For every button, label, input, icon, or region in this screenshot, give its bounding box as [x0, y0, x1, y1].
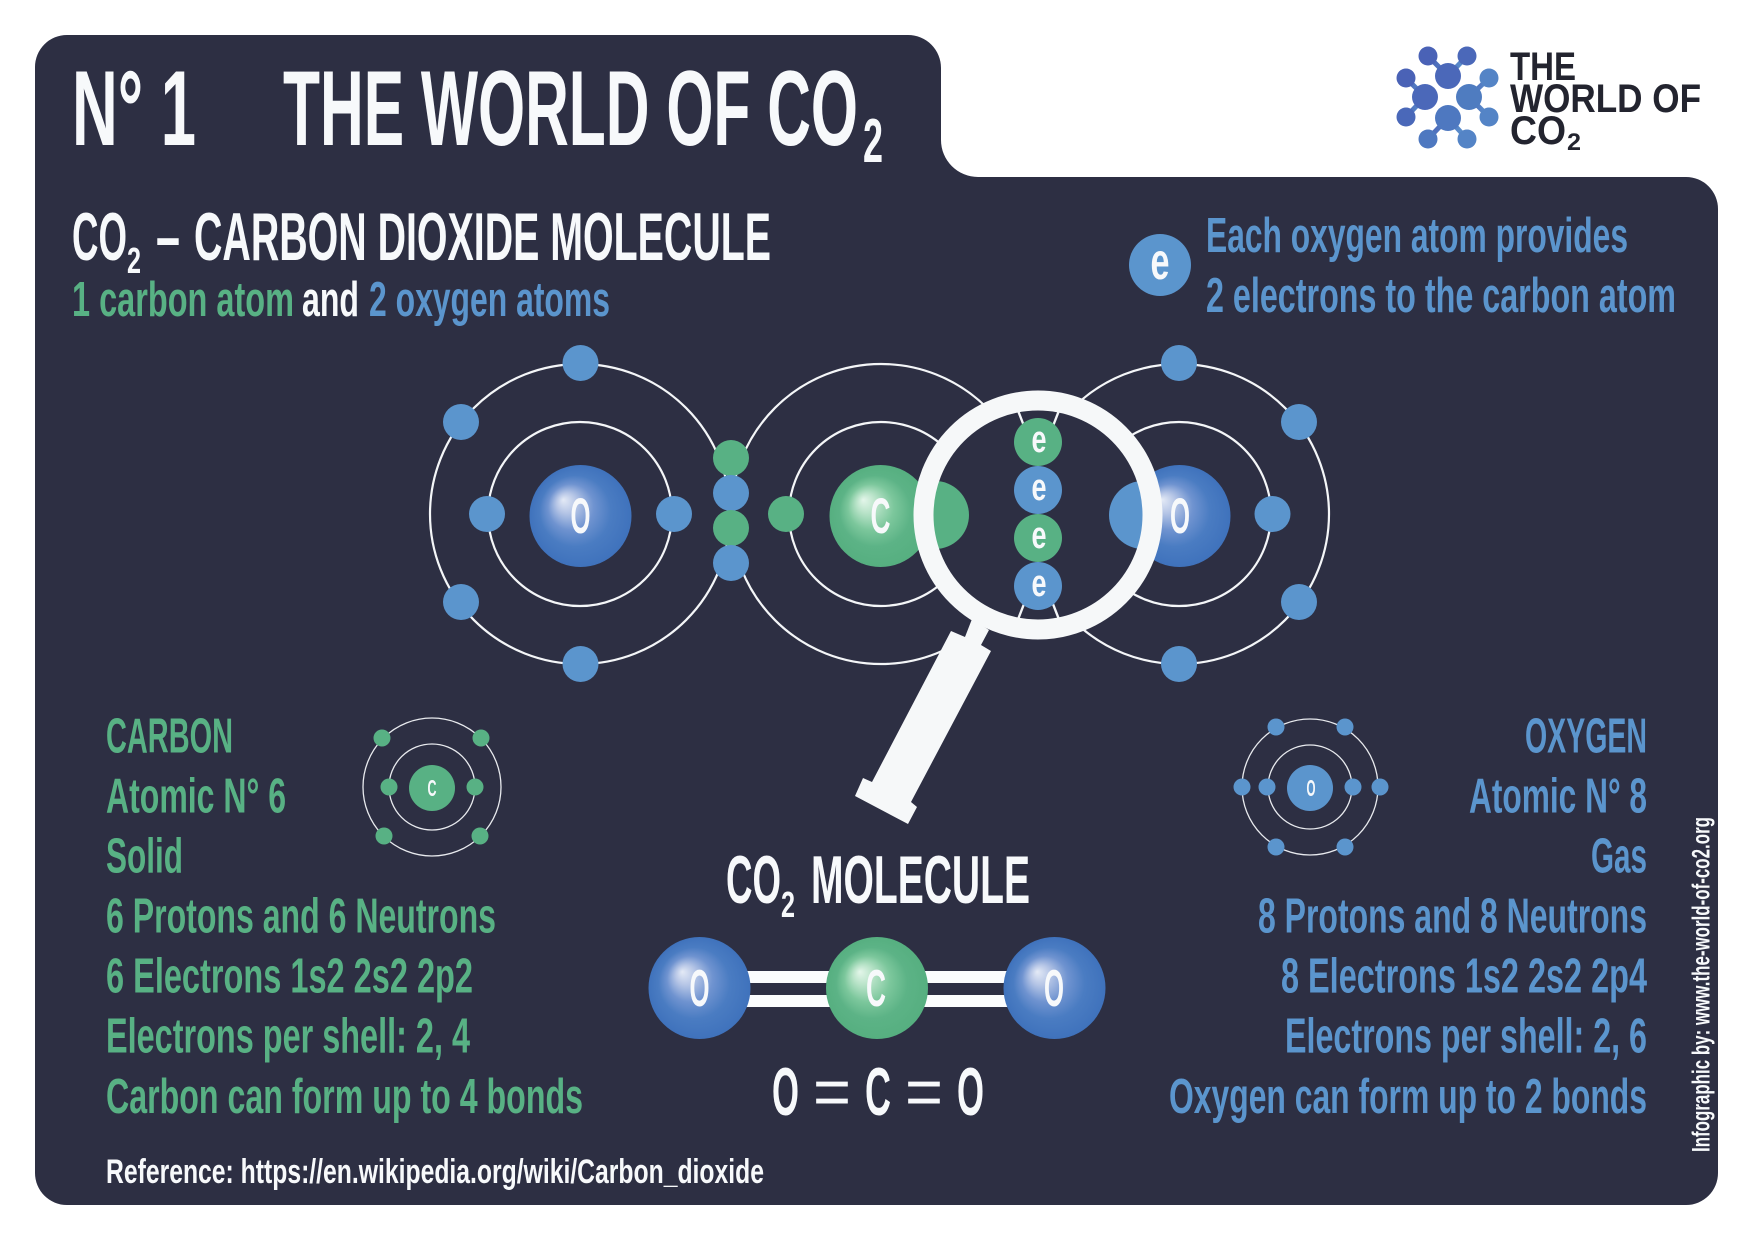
- icon: small oxygen atom: [1234, 718, 1388, 856]
- diagram: electron shells of CO2: [430, 345, 1329, 682]
- subheading: atom counts: and: [302, 273, 359, 327]
- formula: O=C=O: =: [813, 1054, 851, 1130]
- electron: blue bottom: e: [1032, 563, 1046, 605]
- panel: oxygen facts: OXYGEN: [1525, 710, 1647, 764]
- formula: O=C=O: O: [772, 1054, 799, 1130]
- logo wordmark: [1510, 45, 1701, 156]
- icon: magnifying glass with shared electrons: [855, 400, 1177, 824]
- title: N° 1: [72, 48, 196, 168]
- sphere: right oxygen: O: [1044, 960, 1064, 1018]
- logo wordmark: THE: [1510, 45, 1576, 89]
- formula: O=C=O: O: [957, 1054, 984, 1130]
- logo wordmark: WORLD OF: [1510, 77, 1701, 121]
- heading: CO2 molecule: [726, 842, 1030, 925]
- lens contents: [934, 412, 1142, 618]
- icon: electron: e: [1150, 233, 1170, 291]
- reference link: Reference: https://en.wikipedia.org/wiki/Carbon_dioxide: [106, 1153, 764, 1191]
- logo wordmark: CO: [1510, 109, 1566, 153]
- heading: CO2 molecule: 2: [781, 884, 795, 925]
- carbon atom: C: [870, 488, 890, 544]
- panel: carbon facts: 6 Electrons 1s2 2s2 2p2: [106, 950, 473, 1004]
- chart: ball and stick CO2 molecule: [648, 937, 1106, 1039]
- title: [72, 48, 883, 176]
- logo: The World of CO2: [1396, 45, 1701, 156]
- heading: CO2 carbon dioxide molecule: CO: [72, 199, 127, 275]
- formula: O=C=O: C: [865, 1054, 891, 1130]
- subheading: atom counts: 2 oxygen atoms: [369, 273, 610, 327]
- title: 2: [863, 107, 883, 176]
- heading: CO2 carbon dioxide molecule: –: [156, 199, 180, 275]
- shared electrons between oxygen and carbon: [713, 440, 749, 581]
- right oxygen atom: O: [1170, 488, 1190, 544]
- magnifier handle: [855, 619, 991, 824]
- panel: oxygen facts: Gas: [1591, 830, 1647, 884]
- panel: carbon facts: 6 Protons and 6 Neutrons: [106, 890, 496, 944]
- electron: blue upper: [1014, 466, 1062, 514]
- icon: electron: [1129, 233, 1191, 296]
- sphere: right oxygen: [1004, 937, 1106, 1039]
- panel: carbon facts: [106, 710, 583, 1124]
- title: THE WORLD OF CO: [283, 48, 858, 168]
- formula: O=C=O: [772, 1054, 984, 1130]
- icon: small carbon atom: C: [428, 775, 436, 801]
- sphere: left oxygen: O: [690, 960, 710, 1018]
- logo wordmark: 2: [1567, 129, 1581, 156]
- electron: green top: [1014, 418, 1062, 466]
- icon: small oxygen atom: O: [1306, 775, 1316, 801]
- electron: green top: e: [1032, 419, 1046, 461]
- electron: green lower: e: [1032, 515, 1046, 557]
- sphere: carbon: C: [866, 960, 886, 1018]
- panel: carbon facts: CARBON: [106, 710, 233, 764]
- heading: CO2 molecule: MOLECULE: [811, 842, 1030, 918]
- panel: oxygen facts: Atomic N° 8: [1469, 770, 1647, 824]
- electron note text: [1206, 209, 1676, 323]
- heading: CO2 carbon dioxide molecule: 2: [127, 240, 141, 281]
- logo icon: molecule network: [1396, 46, 1498, 148]
- sphere: left oxygen: [648, 937, 750, 1039]
- left oxygen atom: [430, 345, 730, 682]
- heading: CO2 carbon dioxide molecule: [72, 199, 771, 281]
- panel: oxygen facts: [1169, 710, 1647, 1124]
- electron: blue bottom: [1014, 562, 1062, 610]
- panel: carbon facts: Carbon can form up to 4 bonds: [106, 1070, 583, 1124]
- icon: small carbon atom: [363, 718, 501, 856]
- legend: electron note: [1129, 209, 1676, 323]
- left oxygen atom: O: [570, 488, 590, 544]
- subheading: atom counts: 1 carbon atom: [72, 273, 294, 327]
- heading: CO2 carbon dioxide molecule: CARBON DIOXIDE MOLECULE: [194, 199, 771, 275]
- double bonds: [699, 971, 1054, 1007]
- panel: carbon facts: Solid: [106, 830, 183, 884]
- subheading: atom counts: [72, 273, 610, 327]
- electron: green lower: [1014, 514, 1062, 562]
- right oxygen atom: [1029, 345, 1329, 682]
- sphere: carbon: [826, 937, 928, 1039]
- panel: carbon facts: Electrons per shell: 2, 4: [106, 1010, 470, 1064]
- panel: carbon facts: Atomic N° 6: [106, 770, 286, 824]
- lens rim: [924, 400, 1152, 630]
- credit: vertical infographic attribution: Infographic by: www.the-world-of-co2.org: [1688, 817, 1716, 1152]
- carbon atom: [731, 364, 1031, 664]
- formula: O=C=O: =: [905, 1054, 943, 1130]
- electron: blue upper: e: [1032, 467, 1046, 509]
- heading: CO2 molecule: CO: [726, 842, 781, 918]
